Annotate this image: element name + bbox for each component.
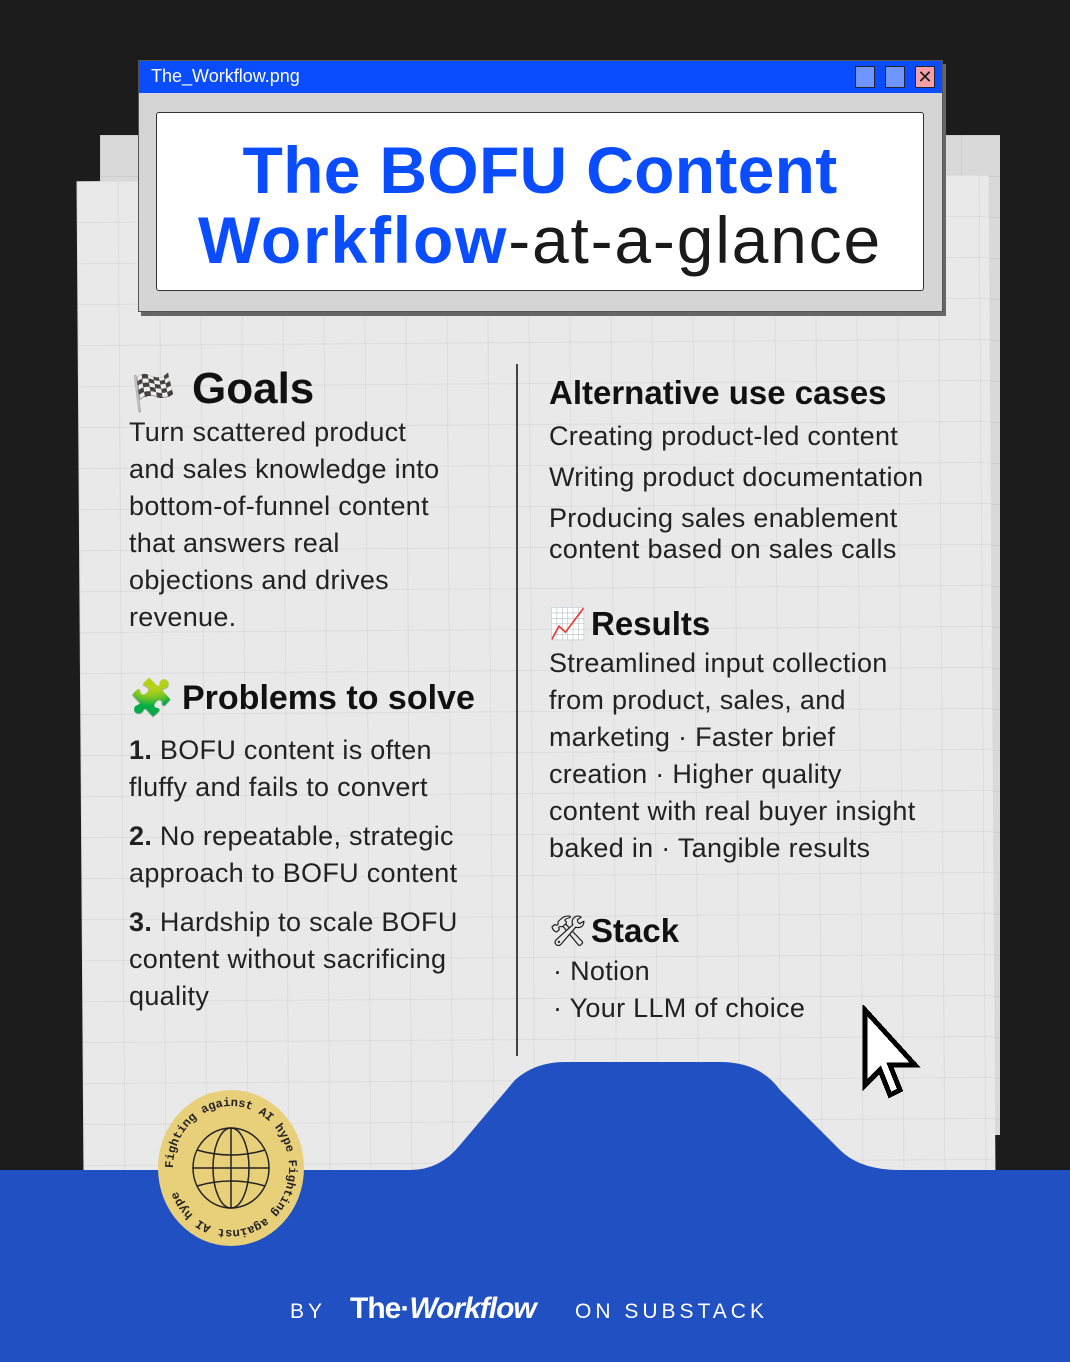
divider [516,364,518,1056]
panel: problems to solve: content without sacrificing [129,944,446,974]
panel: problems to solve: quality [129,981,209,1011]
panel: alternative use cases: Writing product documentation [549,462,923,492]
panel: goals: revenue. [129,602,236,632]
title bar [139,61,942,93]
panel: results: from product, sales, and [549,685,846,715]
filename: The_Workflow.png [151,66,300,86]
icon: tools: 🛠 [549,915,587,948]
heading goals: Goals [192,364,314,413]
title box: Workflow-at-a-glance [198,203,882,277]
title box: The BOFU Content [242,133,838,207]
panel: goals: objections and drives [129,565,389,595]
panel: results: baked in · Tangible results [549,833,870,863]
blue folder with tab [0,1062,1070,1362]
panel: alternative use cases: content based on sales calls [549,534,897,564]
panel: problems to solve: 2. No repeatable, strategic [129,821,454,851]
window buttons [855,66,935,88]
panel: results: Streamlined input collection [549,648,888,678]
panel: goals: that answers real [129,528,340,558]
window buttons: ✕ [917,67,933,87]
panel: stack: · Notion [553,956,650,986]
panel: results [549,605,916,863]
panel: alternative use cases: Producing sales enablement [549,503,898,533]
heading problems: Problems to solve [182,679,475,717]
sticker: fighting against AI hype: Fighting against AI hype Fighting against AI hype [165,1097,298,1238]
panel: problems to solve: 3. Hardship to scale BOFU [129,907,458,937]
title box [156,112,924,291]
panel: goals: bottom-of-funnel content [129,491,429,521]
icon: checkered flag: 🏁 [131,372,176,413]
panel: problems to solve [129,677,475,1011]
paper sheet [77,175,995,1181]
panel: alternative use cases: Creating product-led content [549,421,898,451]
heading stack: Stack [591,912,679,949]
back paper sheet [100,135,1000,1135]
panel: problems to solve: approach to BOFU content [129,858,457,888]
footer credit [290,1292,768,1325]
window: title [138,60,943,312]
heading results: Results [591,605,710,642]
panel: stack: · Your LLM of choice [553,993,805,1023]
panel: problems to solve: fluffy and fails to convert [129,772,428,802]
panel: results: content with real buyer insight [549,796,916,826]
panel: goals: Turn scattered product [129,417,406,447]
heading alt: Alternative use cases [549,374,887,411]
panel: alternative use cases [549,374,923,564]
icon: cursor [862,1005,920,1098]
icon: chart: 📈 [549,608,586,641]
panel: goals [129,364,439,632]
panel: results: marketing · Faster brief [549,722,835,752]
footer credit: BY [290,1300,326,1323]
icon: puzzle: 🧩 [129,677,174,718]
panel: stack [549,912,805,1023]
panel: results: creation · Higher quality [549,759,842,789]
panel: problems to solve: 1. BOFU content is often [129,735,432,765]
logo: The·Workflow [350,1292,536,1325]
panel: goals: and sales knowledge into [129,454,439,484]
footer credit: ON SUBSTACK [575,1300,768,1323]
